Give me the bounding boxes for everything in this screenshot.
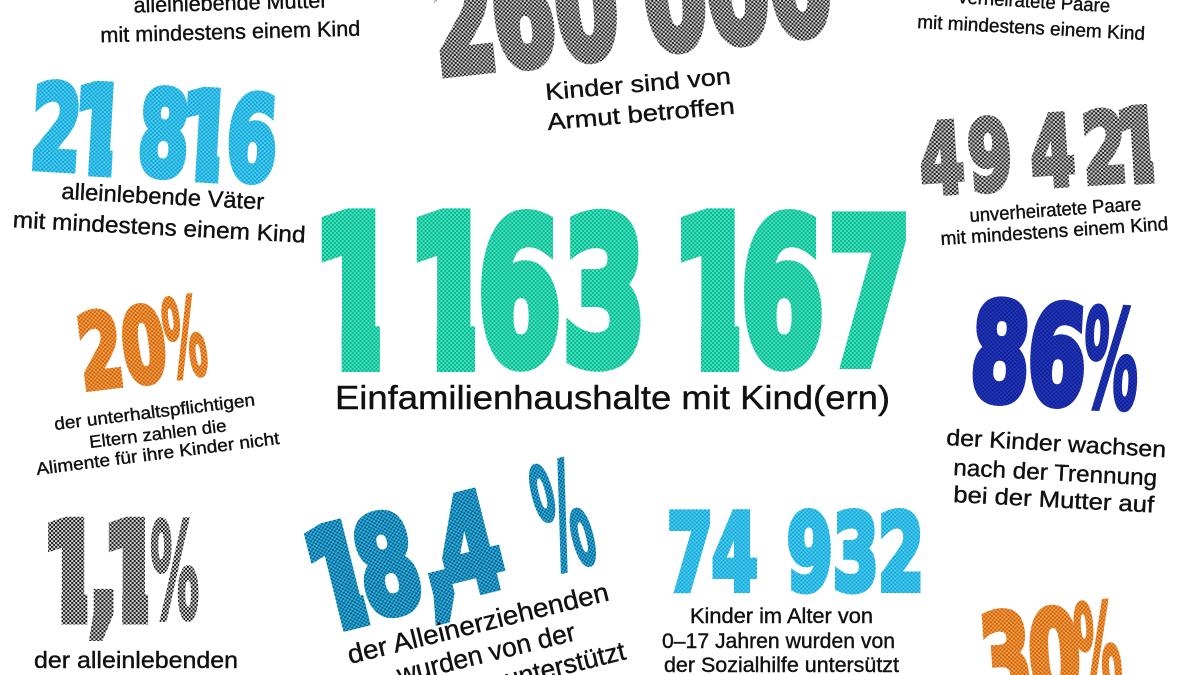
panel: 30 percent: [975, 577, 1126, 675]
big number: 30%: [975, 577, 1126, 675]
label: custody: [946, 424, 1167, 518]
label: poverty: Kinder sind von: [544, 63, 732, 105]
label: alimony: der unterhaltspflichtigen: [53, 390, 256, 434]
label: custody: bei der Mutter auf: [953, 481, 1155, 518]
label: children on welfare: Kinder im Alter von: [690, 605, 873, 628]
label: welfare single parents: der Alleinerziehenden: [344, 577, 612, 670]
label: alimony: Eltern zahlen die: [88, 415, 227, 452]
big number: 18,4 %: 8,4: [340, 464, 517, 649]
label: single fathers: mit mindestens einem Kind: [12, 206, 306, 248]
label: unmarried couples: mit mindestens einem Kind: [940, 214, 1169, 250]
big number: 1,1%: [48, 516, 198, 641]
big number: 49 421: 49: [916, 101, 1016, 218]
big number: 21 816: 2: [27, 61, 85, 197]
big number: 20%: [71, 275, 213, 415]
panel: children in poverty: [423, 0, 840, 135]
label: children on welfare: 0–17 Jahren wurden von: [662, 630, 895, 653]
panel: single mothers: [99, 0, 361, 47]
big number: 18,4 %: [304, 456, 596, 632]
big number: 1 163 167: [322, 208, 906, 372]
panel: children on welfare: [662, 493, 924, 675]
panel: single fathers: [14, 79, 305, 243]
label: single fathers: alleinlebende Väter: [61, 178, 265, 214]
big number: 1 163 167: 1: [674, 181, 757, 409]
label: alimony: [35, 390, 281, 479]
panel: central statistic: [322, 208, 906, 416]
label: custody: der Kinder wachsen: [946, 424, 1167, 462]
big number: 18,4 %: 1: [293, 496, 389, 661]
label: poverty: Armut betroffen: [546, 93, 736, 135]
big number: 21 816: 8: [135, 67, 193, 203]
label: children on welfare: [662, 605, 899, 675]
label: single fathers: [12, 175, 308, 248]
big number: 1,1%: ,: [88, 498, 119, 649]
big number: 21 816: 6: [223, 72, 281, 208]
big number: 1 163 167: 67: [741, 181, 911, 409]
panel: single parents on welfare: [304, 456, 627, 675]
big number: 20%: 20: [72, 285, 173, 413]
panel: single living share: [34, 516, 237, 668]
big number: 1,1%: %: [150, 495, 199, 650]
big number: 21 816: 1: [70, 63, 128, 200]
label: single living: der alleinlebenden: [34, 647, 238, 673]
big number: 21 816: 1: [177, 69, 235, 206]
label: married couples: mit mindestens einem Kind: [917, 12, 1146, 45]
panel: unmarried couples: [920, 104, 1168, 246]
big number: 86%: 86: [967, 276, 1090, 436]
label: unmarried couples: unverheiratete Paare: [969, 194, 1142, 227]
big number: 1 163 167: 1: [314, 181, 397, 409]
panel: large family share: [946, 275, 1167, 518]
label: unmarried couples: [940, 194, 1169, 250]
label: poverty: [544, 63, 736, 135]
big number: 49 421: [920, 104, 1161, 196]
big number: 20%: %: [156, 275, 213, 405]
big number: 1,1%: 1: [43, 498, 99, 649]
big number: 18,4 %: %: [517, 429, 609, 607]
big number: 49 421: 42: [1027, 93, 1130, 210]
label: single mothers: [99, 0, 361, 47]
big number: 1 163 167: 63: [478, 181, 646, 409]
big number: 86%: [967, 275, 1143, 441]
big number: 74 932: 74 932: [667, 493, 924, 615]
panel: unpaid alimony: [35, 275, 281, 479]
big number: 49 421: 1: [1114, 91, 1165, 204]
big number: 86%: %: [1079, 280, 1143, 441]
label: single mothers: mit mindestens einem Kind: [100, 17, 361, 47]
big number: 1 163 167: 1: [409, 181, 492, 409]
big number: 21 816: [32, 79, 276, 185]
label: alimony: Alimente für ihre Kinder nicht: [35, 428, 281, 479]
panel: married couples: [917, 0, 1146, 45]
big number: 1,1%: 1: [104, 498, 160, 649]
label: households: Einfamilienhaushalte mit Kind(ern): [335, 379, 890, 416]
label: custody: nach der Trennung: [953, 454, 1158, 491]
